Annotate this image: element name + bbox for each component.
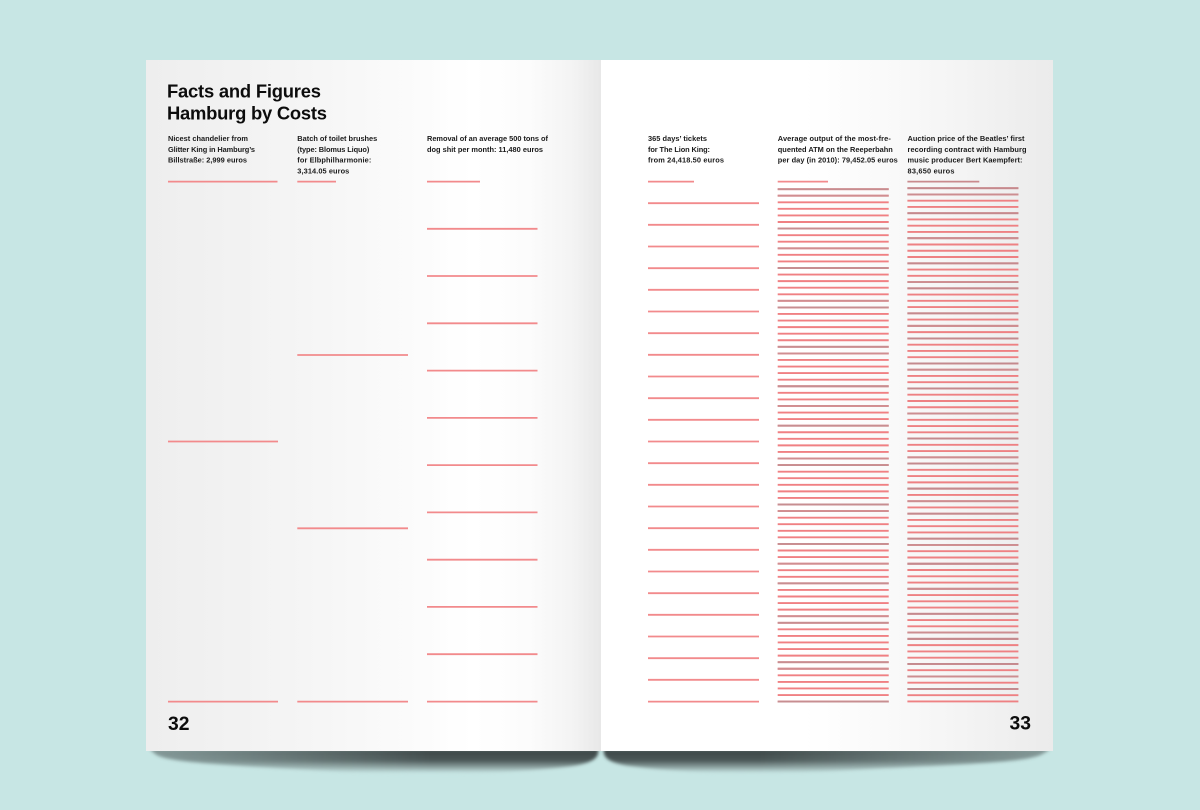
text: Lion King tickets: from 24,418.50 euros [648, 156, 724, 165]
line chart: toilet brushes, 3,314.05 euros [297, 182, 408, 702]
text: Beatles contract: music producer Bert Kaempfert: [908, 156, 1022, 165]
line chart: ATM output, 79,452.05 euros [778, 181, 889, 702]
line chart: Lion King tickets, 24,418.50 euros [648, 182, 759, 702]
text: Beatles contract: recording contract with Hamburg [908, 145, 1027, 154]
text: toilet brushes: for Elbphilharmonie: [297, 156, 371, 165]
shadow: under left page [150, 749, 598, 774]
text: toilet brushes: (type: Blomus Liquo) [297, 145, 370, 154]
text: Lion King tickets [648, 134, 724, 165]
text: ATM output: per day (in 2010): 79,452.05 euros [778, 156, 898, 165]
page number 33: 33 [1010, 713, 1031, 735]
text: ATM output: Average output of the most-fre- [778, 134, 891, 143]
title: Hamburg by Costs [167, 102, 327, 123]
text: Beatles contract: Auction price of the Beatles’ first [908, 134, 1025, 143]
text: Lion King tickets: for The Lion King: [648, 145, 710, 154]
line chart: chandelier, 2,999 euros [168, 182, 278, 702]
line chart: dog shit removal, 11,480 euros [427, 182, 538, 702]
left page [146, 60, 601, 751]
text: dog shit removal [427, 134, 549, 154]
text: toilet brushes [297, 134, 377, 175]
shadow: under right page [604, 749, 1050, 773]
text: dog shit removal: dog shit per month: 11,480 euros [427, 145, 543, 154]
text: toilet brushes: Batch of toilet brushes [297, 134, 377, 143]
text: ATM output: quented ATM on the Reeperbahn [778, 145, 893, 154]
text: chandelier [168, 134, 255, 165]
text: chandelier: Billstraße: 2,999 euros [168, 156, 247, 165]
text: Beatles contract [908, 134, 1027, 175]
title [167, 80, 327, 123]
text: chandelier: Nicest chandelier from [168, 134, 248, 143]
text: Lion King tickets: 365 days’ tickets [648, 134, 707, 143]
title: Facts and Figures [167, 80, 321, 101]
text: toilet brushes: 3,314.05 euros [297, 166, 349, 175]
page number 32: 32 [168, 713, 190, 735]
text: dog shit removal: Removal of an average 500 tons of [427, 134, 549, 143]
right page [601, 60, 1053, 751]
line chart: Beatles contract, 83,650 euros [907, 181, 1018, 702]
text: ATM output [778, 134, 898, 165]
text: chandelier: Glitter King in Hamburg’s [168, 145, 255, 154]
text: Beatles contract: 83,650 euros [908, 166, 954, 175]
